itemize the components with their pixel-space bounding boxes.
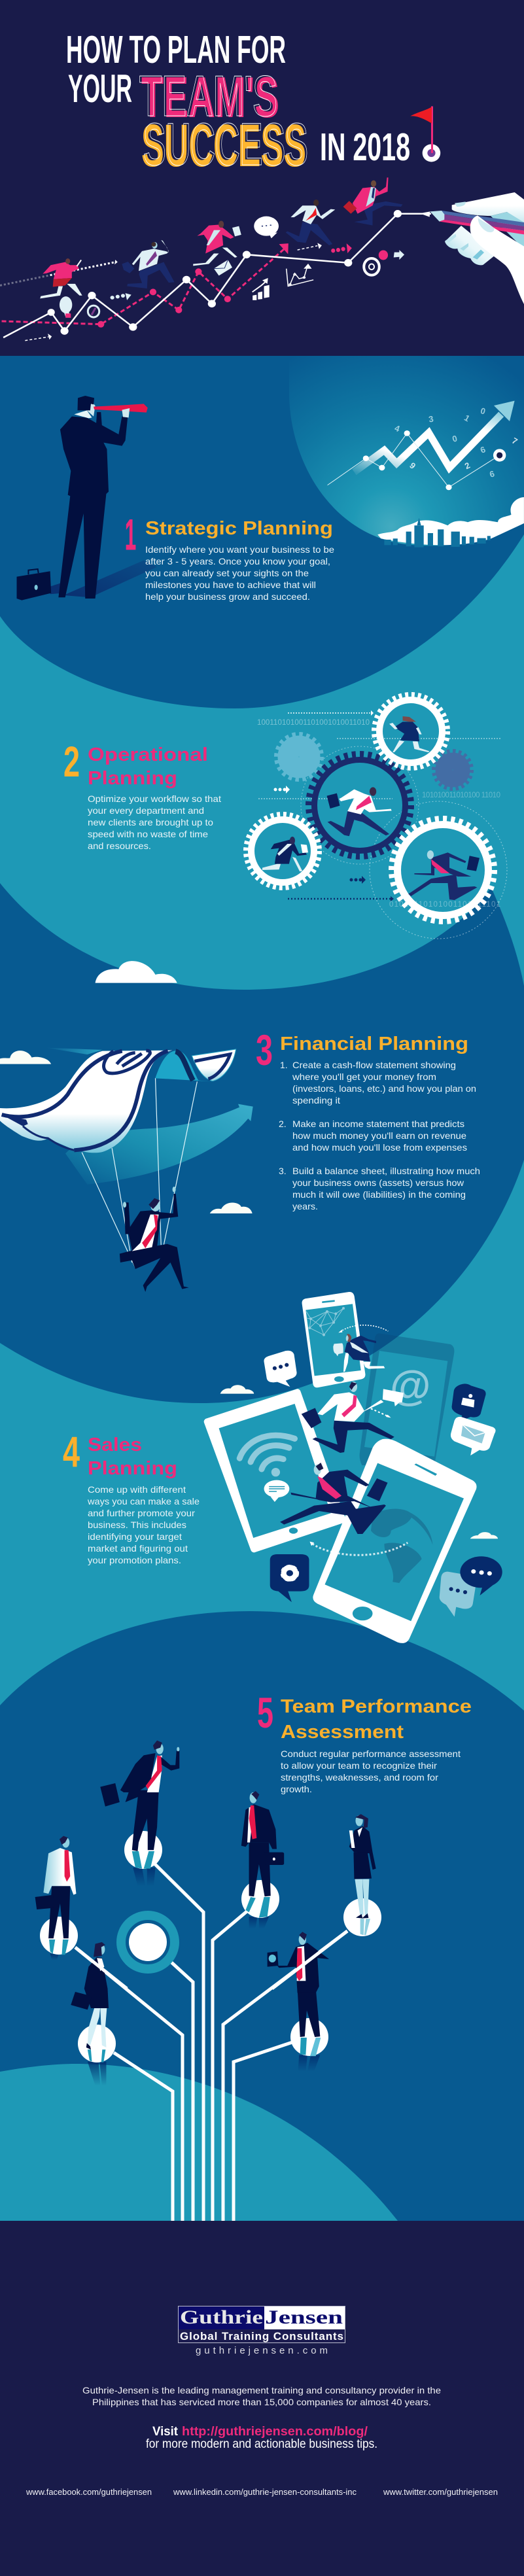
runner: woman left [262, 837, 308, 871]
bubble: person [452, 1384, 486, 1421]
runner: navy jacket [280, 1463, 388, 1534]
icon: flag and target [410, 106, 440, 162]
chart digits: 9 [408, 461, 417, 471]
gear: light blue [276, 734, 322, 780]
step 4: text block: identifying your target [88, 1531, 182, 1542]
title: HOW TO PLAN FOR [66, 28, 286, 71]
gear: top white [374, 695, 447, 768]
icon: speech bubble [254, 217, 279, 238]
gear: centre navy [309, 754, 411, 856]
section 2 illustration: gears background lines: 100110101001101001010011010 [257, 719, 370, 727]
footer: company logo [178, 2306, 345, 2356]
person: woman with folder [349, 1814, 376, 1935]
chart digits: 6 [479, 444, 487, 455]
footer: company logo: Jensen [265, 2306, 343, 2328]
title: TEAM'S [141, 65, 279, 130]
section 3 illustration: businessman on strings [82, 1078, 197, 1292]
runner 4 [286, 200, 335, 245]
step 5: text block [281, 1749, 461, 1794]
person: man with tablet [268, 1932, 329, 2056]
footer: company logo: Global Training Consultants [180, 2330, 343, 2342]
footer: visit blog call to action: http://guthriejensen.com/blog/ [182, 2425, 368, 2439]
step 5: text block: to allow your team to recognize their [281, 1760, 437, 1771]
step 2: text block: Optimize your workflow so that [88, 793, 221, 804]
step 4: number: 4 [63, 1427, 80, 1476]
section 3 clouds [0, 1051, 253, 1213]
runner 3 [193, 220, 241, 266]
step 2: text block: new clients are brought up to [88, 817, 213, 827]
footer: company description: Philippines that has serviced more than 15,000 companies for almost 40 years. [92, 2397, 431, 2407]
step 4: text block: business. This includes [88, 1520, 186, 1530]
icon: hand holding pencil [419, 192, 524, 304]
icon: line chart [287, 264, 313, 286]
text: 1 [125, 510, 136, 559]
small phone with running woman [302, 1292, 388, 1387]
section 5: circuit lines [75, 1858, 347, 2221]
step 2: heading: Planning [88, 768, 177, 789]
bubble: gear [270, 1554, 309, 1602]
step 3: numbered list: how much money you'll earn on revenue [292, 1130, 466, 1141]
footer: social links: www.linkedin.com/guthrie-jensen-consultants-inc [173, 2487, 357, 2497]
step 3: numbered list: 3. [279, 1166, 287, 1176]
gear: left white [246, 814, 319, 888]
footer: company description [82, 2385, 441, 2407]
title: SUCCESS [141, 113, 306, 179]
runner 5 [343, 177, 403, 226]
section 5: circuit lines over figures [75, 1931, 347, 1989]
section 4 illustration: devices and runners [207, 1351, 502, 1643]
step 4: text block: market and figuring out [88, 1543, 188, 1554]
person: man with raised hand [100, 1741, 179, 1869]
step 5: number: 5 [257, 1688, 273, 1737]
section 2 illustration: gears background lines: 01010110101001101011101 [389, 901, 500, 909]
step 4: text block: and further promote your [88, 1508, 195, 1518]
gear: purple blue [434, 751, 472, 789]
step 5: heading: Assessment [281, 1722, 404, 1743]
footer: social links: www.twitter.com/guthriejensen [383, 2487, 498, 2497]
chart digits: 2 [463, 461, 472, 471]
step 4: text block: Come up with different [88, 1484, 186, 1495]
section 5: reflections under the circles [50, 1868, 320, 2085]
man [120, 1187, 189, 1292]
tablet [207, 1392, 343, 1549]
section 5: centre ring node [121, 1915, 175, 1969]
step 2: text block: speed with no waste of time [88, 829, 208, 839]
step 5: text block: Conduct regular performance assessment [281, 1749, 461, 1759]
chart digits [393, 406, 519, 479]
step 1: text block: you can already set your sights on the [145, 568, 309, 578]
step 3: numbered list: (investors, loans, etc.) and how you plan on [292, 1083, 476, 1094]
icon: bars [253, 278, 270, 300]
woman [343, 1334, 385, 1372]
step 1: text block: help your business grow and succeed. [145, 591, 310, 602]
illustration: team running up the growth chart [0, 177, 431, 341]
bubble: chat small [264, 1480, 289, 1502]
footer: social links: www.facebook.com/guthriejensen [26, 2487, 152, 2497]
step 3: numbered list: 1. [280, 1060, 288, 1070]
icon: bulb [60, 296, 72, 318]
step 3: heading: Financial Planning [280, 1034, 468, 1054]
chart digits: 0 [451, 433, 458, 444]
section 3 illustration: flying banknote and arrow [0, 1048, 253, 1185]
icon: target ring [88, 305, 99, 317]
under wing [155, 1051, 213, 1081]
strings [82, 1078, 197, 1268]
step 5: text block: growth. [281, 1784, 312, 1794]
section 5: team members on the nodes [35, 1741, 376, 2063]
bubble: light chat [440, 1572, 476, 1617]
step 5: heading [281, 1696, 472, 1743]
person: woman lower left [71, 1942, 109, 2063]
title: TEAM'S [139, 63, 277, 128]
chart digits: 1 [463, 413, 472, 423]
gear: right white [392, 819, 494, 921]
chart digits: 3 [428, 414, 434, 425]
growth arrow [65, 1104, 253, 1185]
footer: company logo: Guthrie [180, 2306, 263, 2328]
step 4: text block [87, 1484, 200, 1565]
step 1: text block: milestones you have to achieve that will [145, 580, 316, 590]
chart digits: 6 [489, 468, 495, 479]
dotted arcs [313, 1408, 408, 1555]
right flap [192, 1049, 236, 1081]
bubble: envelope [451, 1417, 496, 1455]
section 5: white circle nodes [40, 1831, 381, 2063]
chart digits: 7 [510, 436, 519, 446]
icon: gears [364, 250, 404, 275]
runner: white shirt [302, 1382, 404, 1453]
banknote emblem [104, 1051, 150, 1073]
runner: man right [408, 850, 480, 900]
gear runners [262, 716, 480, 900]
section 1 illustration: businessman with telescope [17, 396, 157, 600]
step 3: numbered list: Build a balance sheet, illustrating how much [292, 1166, 480, 1176]
step 1: text block: Identify where you want your business to be [145, 544, 334, 555]
small bubble [333, 1343, 343, 1356]
step 2: number: 2 [63, 737, 80, 786]
chart digits: 0 [480, 406, 487, 417]
clouds [220, 1385, 498, 1539]
step 3: numbered list: spending it [292, 1095, 340, 1105]
section 2 illustration: gears background lines: 101010011010100 11010 [422, 792, 500, 799]
icon: at sign: @ [390, 1362, 430, 1409]
icon: dotted arrows [25, 243, 352, 341]
bubble: navy round [460, 1556, 502, 1595]
step 4: text block: your promotion plans. [88, 1555, 181, 1565]
section 2 illustration: gears background lines [257, 710, 507, 939]
step 2: heading [88, 744, 208, 789]
step 4: heading: Planning [88, 1458, 177, 1479]
runner: woman top [389, 716, 429, 752]
person: man in white shirt [35, 1836, 76, 1955]
footer: visit blog call to action [146, 2425, 377, 2451]
briefcase [17, 569, 51, 600]
step 2: text block: and resources. [88, 841, 151, 851]
step 3: numbered list: Create a cash-flow statement showing [292, 1060, 456, 1070]
title: IN 2018 [320, 126, 410, 169]
footer: visit blog call to action: for more modern and actionable business tips. [146, 2437, 377, 2451]
footer: company description: Guthrie-Jensen is the leading management training and consultancy provider in the [82, 2385, 441, 2395]
note body [0, 1051, 172, 1153]
step 5: heading: Team Performance [281, 1696, 472, 1717]
step 3: numbered list: 2. [279, 1119, 287, 1129]
icon: envelope [214, 260, 232, 275]
title: YOUR [68, 67, 132, 111]
step 3: numbered list: your business owns (assets) versus how [292, 1177, 464, 1188]
footer: social links [26, 2487, 498, 2497]
person: man with briefcase [241, 1791, 284, 1918]
step 2: text block: your every department and [88, 805, 204, 816]
title [66, 28, 410, 179]
runner: man centre [327, 787, 392, 836]
runner 1 [40, 258, 82, 298]
step 1: heading: Strategic Planning [145, 518, 333, 539]
step 4: text block: ways you can make a sale [87, 1496, 200, 1506]
chart digits: 4 [393, 423, 402, 434]
big phone [313, 1439, 477, 1643]
section 1 illustration: growth chart and skyline [328, 401, 524, 548]
footer: visit blog call to action: Visit [152, 2425, 179, 2439]
step 3: numbered list: years. [292, 1201, 318, 1211]
step 3: number: 3 [256, 1026, 273, 1074]
step 3: numbered list: and how much you'll lose from expenses [292, 1142, 467, 1153]
step 1: text block [145, 544, 334, 602]
step 3: numbered list: much it will owe (liabilities) in the coming [292, 1189, 466, 1200]
footer: company logo: guthriejensen.com [196, 2345, 328, 2356]
step 5: text block: strengths, weaknesses, and room for [281, 1772, 438, 1783]
step 3: numbered list [279, 1060, 480, 1211]
step 4: heading [88, 1435, 177, 1479]
step 2: text block [88, 793, 221, 851]
step 2: heading: Operational [88, 744, 208, 765]
ghost phone behind runners [360, 1333, 454, 1465]
bubble: dots [264, 1351, 297, 1387]
step 3: numbered list: where you'll get your money from [292, 1071, 436, 1082]
step 4: heading: Sales [88, 1435, 142, 1455]
step 3: numbered list: Make an income statement that predicts [292, 1119, 464, 1129]
cloud: section 2 [96, 961, 177, 983]
title: SUCCESS [143, 111, 308, 178]
step 1: text block: after 3 - 5 years. Once you know your goal, [145, 556, 330, 566]
runner 2 [122, 240, 175, 288]
